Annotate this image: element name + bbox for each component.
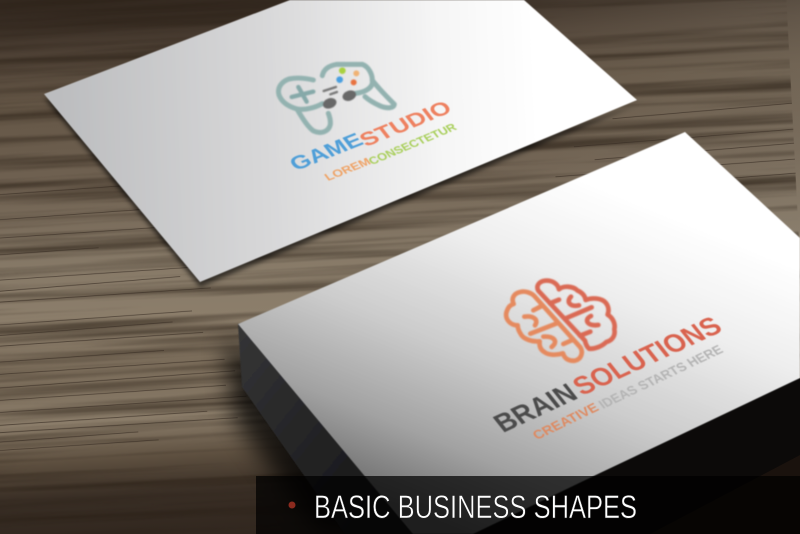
logo text: GAMESTUDIO xyxy=(285,97,456,175)
business card: Brain Solutions xyxy=(238,132,800,534)
logo text: BRAINSOLUTIONS xyxy=(487,311,728,438)
tagline: LOREMCONSECTETUR: LOREM xyxy=(323,157,374,183)
tagline: CREATIVE IDEAS STARTS HERE: CREATIVE xyxy=(530,400,602,442)
logo text: BRAINSOLUTIONS: BRAIN xyxy=(487,378,583,438)
logo text: GAMESTUDIO: GAME xyxy=(285,129,368,175)
tagline: LOREMCONSECTETUR xyxy=(323,122,460,183)
icon: game controller logo xyxy=(278,64,394,132)
logo text: BRAINSOLUTIONS: SOLUTIONS xyxy=(566,311,728,401)
caption text: BASIC BUSINESS SHAPES xyxy=(314,489,637,525)
right hemisphere xyxy=(537,281,615,349)
caption bar xyxy=(256,476,800,534)
left hemisphere xyxy=(506,292,582,361)
shadow around card stack xyxy=(225,340,800,534)
shadow under top card xyxy=(44,98,638,287)
card stack sides xyxy=(238,324,800,534)
tagline: CREATIVE IDEAS STARTS HERE xyxy=(530,342,726,442)
logo text: GAMESTUDIO: STUDIO xyxy=(355,97,456,151)
tagline: CREATIVE IDEAS STARTS HERE: IDEAS STARTS HERE xyxy=(596,342,726,411)
business card: Game Studio xyxy=(44,0,637,282)
tagline: LOREMCONSECTETUR: CONSECTETUR xyxy=(367,122,460,167)
bullet dot xyxy=(288,502,296,508)
icon: brain logo xyxy=(506,281,615,361)
